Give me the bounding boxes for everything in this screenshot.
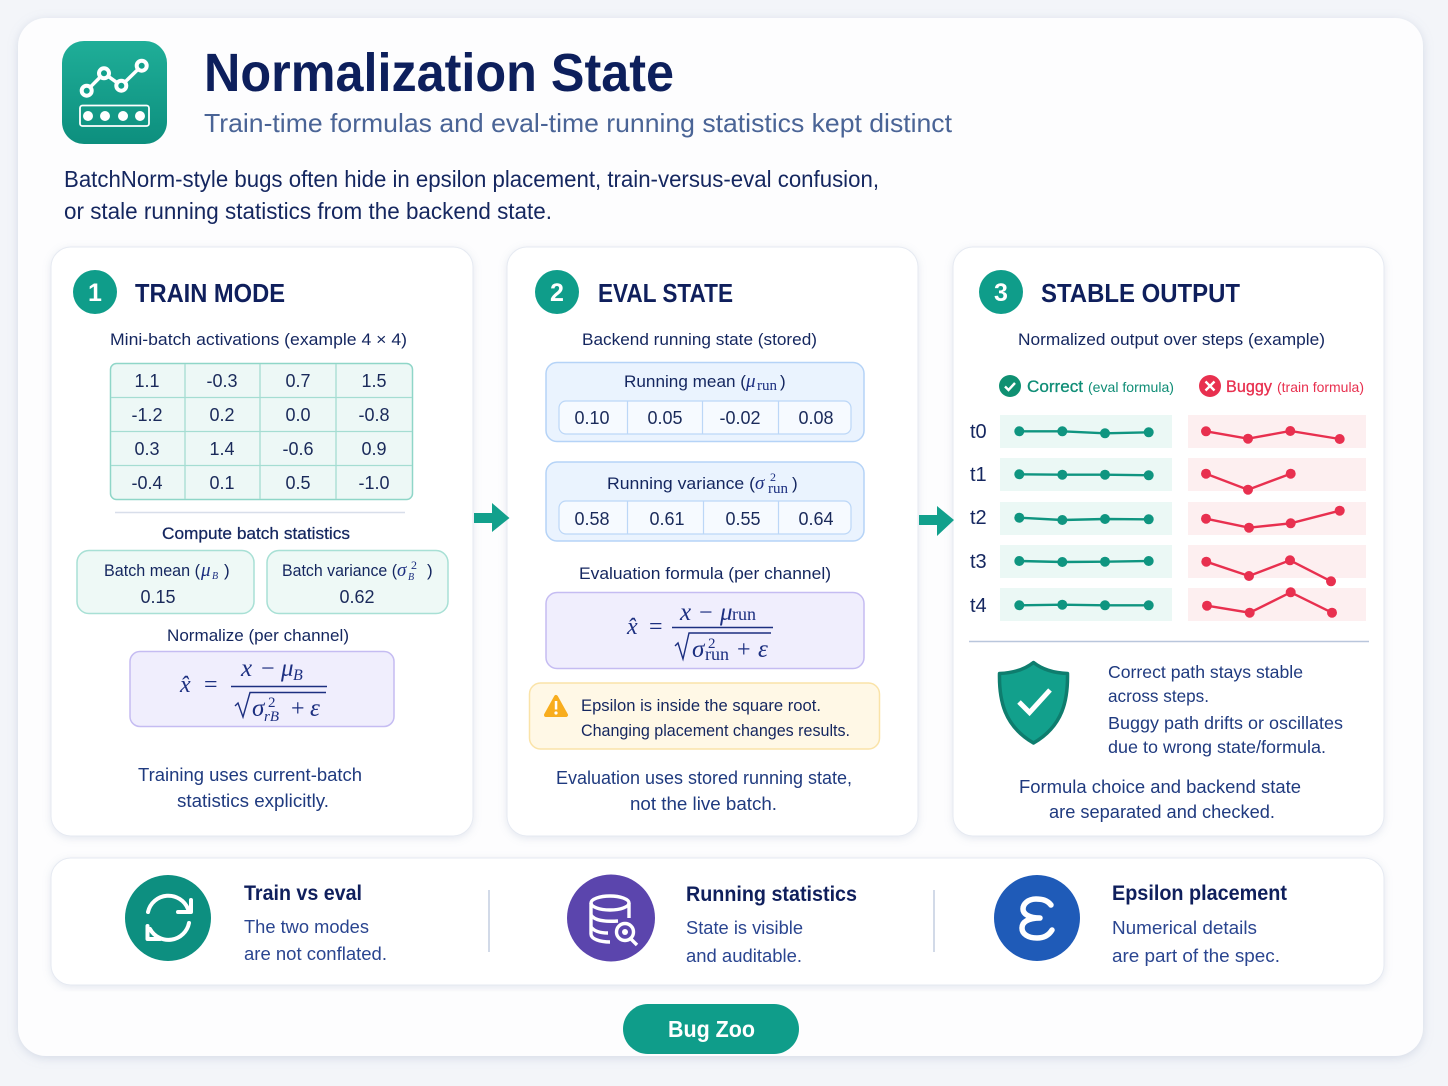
running variance box: 0.55 — [725, 509, 761, 529]
batch variance box: 0.62 — [339, 587, 375, 607]
item: train vs eval: The two modes — [244, 916, 369, 937]
formula: batch normalize: x — [240, 655, 252, 682]
activations table: -0.3 — [206, 371, 238, 391]
activations table: 0.2 — [209, 405, 235, 425]
note: path comparison: across steps. — [1108, 686, 1209, 706]
note: path comparison — [1108, 662, 1343, 757]
batch variance box: σ — [397, 560, 407, 581]
batch mean box: Batch mean ( — [104, 561, 200, 580]
intro text: or stale running statistics from the backend state. — [64, 198, 552, 224]
legend: buggy: (train formula) — [1277, 379, 1364, 395]
formula: evaluation: x̂ — [626, 614, 638, 640]
item: epsilon placement — [1112, 882, 1287, 966]
batch variance box: B — [408, 572, 414, 583]
legend: buggy — [1199, 375, 1364, 397]
caption: compute batch statistics: Compute batch statistics — [162, 524, 350, 543]
running mean box — [546, 362, 864, 442]
item: running statistics: and auditable. — [686, 945, 802, 966]
batch variance box: 2 — [411, 558, 417, 572]
activations table: 0.9 — [361, 439, 387, 459]
formula: evaluation: run — [732, 604, 756, 624]
item: train vs eval: are not conflated. — [244, 943, 387, 964]
formula: batch normalize: 2 — [268, 695, 276, 711]
step badge 2 — [535, 270, 579, 314]
running mean box: 0.10 — [574, 408, 610, 428]
heading: train mode: TRAIN MODE — [135, 278, 285, 308]
note: evaluation: not the live batch. — [630, 793, 777, 814]
icon: epsilon — [994, 875, 1080, 961]
activations table: 0.3 — [134, 439, 160, 459]
formula: evaluation: = — [649, 614, 663, 640]
formula: evaluation: 2 — [708, 636, 716, 652]
batch variance box — [267, 550, 448, 614]
intro text — [64, 166, 879, 224]
formula: evaluation: + — [737, 637, 751, 663]
formula: batch normalize: μ — [280, 655, 294, 682]
icon: database search — [567, 874, 655, 962]
heading: stable output: STABLE OUTPUT — [1041, 278, 1240, 308]
note: formula and state: Formula choice and backend state — [1019, 776, 1301, 797]
subtitle: Train-time formulas and eval-time running statistics kept distinct — [204, 108, 953, 138]
step labels: t2 — [970, 507, 987, 529]
caption: normalized output: Normalized output over steps (example) — [1018, 330, 1325, 349]
step badge 3: 3 — [994, 279, 1008, 307]
tag: bug zoo: Bug Zoo — [668, 1016, 755, 1042]
batch variance box: Batch variance ( — [282, 561, 397, 580]
item: running statistics: State is visible — [686, 917, 803, 938]
activations table: 0.7 — [285, 371, 311, 391]
formula: batch normalize: ε — [310, 695, 320, 722]
icon: shield with check — [999, 662, 1068, 743]
formula: evaluation: − — [699, 600, 713, 626]
running mean box: -0.02 — [719, 408, 761, 428]
batch mean box: ) — [224, 561, 230, 580]
batch variance box: ) — [427, 561, 433, 580]
note: training — [138, 764, 362, 811]
formula: evaluation: x — [679, 599, 691, 626]
note: path comparison: Buggy path drifts or oscillates — [1108, 713, 1343, 733]
note: path comparison: Correct path stays stable — [1108, 662, 1303, 682]
caption: mini-batch activations: Mini-batch activations (example 4 × 4) — [110, 330, 407, 349]
running mean box: 0.08 — [798, 408, 834, 428]
title: Normalization State — [204, 43, 674, 103]
note: evaluation: Evaluation uses stored running state, — [556, 767, 852, 788]
running variance box: 2 — [770, 470, 776, 484]
formula: batch normalize: − — [261, 656, 275, 682]
icon: header chart and batch row — [62, 41, 167, 144]
panel: eval state — [507, 247, 918, 836]
activations table: 1.5 — [361, 371, 387, 391]
formula: batch normalize: B — [293, 667, 303, 684]
note: formula and state — [1019, 776, 1301, 822]
running mean box: run — [757, 378, 777, 394]
chart: buggy path rows — [1188, 415, 1366, 621]
item: epsilon placement: Numerical details — [1112, 917, 1257, 938]
caption: evaluation formula: Evaluation formula (per channel) — [579, 564, 831, 583]
activations table: 0.0 — [285, 405, 311, 425]
legend: buggy: Buggy — [1226, 377, 1272, 396]
panel: summary strip — [51, 858, 1384, 985]
running variance box: σ — [755, 473, 765, 494]
formula: batch normalize: σ — [252, 695, 266, 722]
step labels: t1 — [970, 464, 987, 486]
activations table: -0.8 — [358, 405, 390, 425]
tag: bug zoo — [623, 1004, 799, 1054]
note: formula and state: are separated and checked. — [1049, 801, 1275, 822]
heading: eval state: EVAL STATE — [598, 278, 733, 308]
running mean box: ) — [780, 372, 786, 391]
callout: epsilon warning: Changing placement changes results. — [581, 721, 850, 740]
item: train vs eval — [244, 882, 387, 964]
formula: evaluation: μ — [719, 599, 733, 626]
formula: batch normalize — [130, 652, 394, 726]
running mean box: 0.05 — [647, 408, 683, 428]
callout: epsilon warning — [530, 683, 880, 749]
arrow: train to eval — [474, 503, 510, 532]
formula: evaluation: σ — [692, 636, 706, 663]
step badge 1 — [73, 270, 117, 314]
callout: epsilon warning: Epsilon is inside the square root. — [581, 696, 821, 715]
step badge 3 — [979, 270, 1023, 314]
activations table: -1.0 — [358, 473, 390, 493]
item: epsilon placement: are part of the spec. — [1112, 945, 1280, 966]
batch mean box — [77, 550, 254, 614]
activations table: -1.2 — [131, 405, 163, 425]
activations table: -0.4 — [131, 473, 163, 493]
item: epsilon placement: Epsilon placement — [1112, 882, 1287, 905]
step labels: t0 — [970, 421, 987, 443]
activations table: 1.1 — [134, 371, 160, 391]
activations table: 0.5 — [285, 473, 311, 493]
formula: evaluation: run — [705, 644, 729, 664]
running variance box: run — [768, 481, 788, 497]
legend: correct: (eval formula) — [1088, 379, 1174, 395]
batch mean box: μ — [200, 560, 211, 581]
running variance box: 0.64 — [798, 509, 834, 529]
arrow: eval to output — [919, 506, 954, 536]
note: training: statistics explicitly. — [177, 790, 329, 811]
running variance box — [546, 462, 864, 541]
legend: correct — [999, 375, 1174, 397]
formula: evaluation — [546, 592, 864, 668]
batch mean box: B — [212, 571, 218, 582]
chart: correct path rows — [1000, 415, 1172, 621]
item: running statistics: Running statistics — [686, 883, 857, 906]
note: training: Training uses current-batch — [138, 764, 362, 785]
formula: batch normalize: = — [204, 672, 218, 698]
panel: train mode — [51, 247, 473, 836]
note: path comparison: due to wrong state/formula. — [1108, 737, 1326, 757]
formula: evaluation: ε — [758, 636, 768, 663]
intro text: BatchNorm-style bugs often hide in epsilon placement, train-versus-eval confusion, — [64, 166, 879, 192]
formula: batch normalize: + — [291, 696, 305, 722]
running mean box: Running mean ( — [624, 372, 746, 391]
step badge 1: 1 — [88, 279, 102, 307]
running variance box: 0.58 — [574, 509, 610, 529]
activations table: 1.4 — [209, 439, 235, 459]
running mean box: μ — [745, 371, 756, 392]
item: train vs eval: Train vs eval — [244, 882, 362, 905]
formula: batch normalize: rB — [264, 709, 279, 725]
formula: batch normalize: x̂ — [179, 672, 191, 698]
activations table: 0.1 — [209, 473, 235, 493]
caption: normalize: Normalize (per channel) — [167, 626, 349, 645]
icon: warning triangle — [546, 697, 566, 715]
activations table: -0.6 — [282, 439, 314, 459]
batch mean box: 0.15 — [140, 587, 176, 607]
icon: sync arrows — [125, 875, 211, 961]
step badge 2: 2 — [550, 279, 564, 307]
running variance box: Running variance ( — [607, 474, 755, 493]
step labels: t3 — [970, 551, 987, 573]
running variance box: ) — [792, 474, 798, 493]
note: evaluation — [556, 767, 852, 814]
caption: backend running state: Backend running state (stored) — [582, 330, 817, 349]
step labels: t4 — [970, 595, 987, 617]
step labels — [970, 421, 987, 617]
activations table — [110, 364, 412, 500]
panel: stable output — [953, 247, 1384, 836]
item: running statistics — [686, 883, 857, 966]
legend: correct: Correct — [1027, 377, 1083, 396]
running variance box: 0.61 — [649, 509, 685, 529]
